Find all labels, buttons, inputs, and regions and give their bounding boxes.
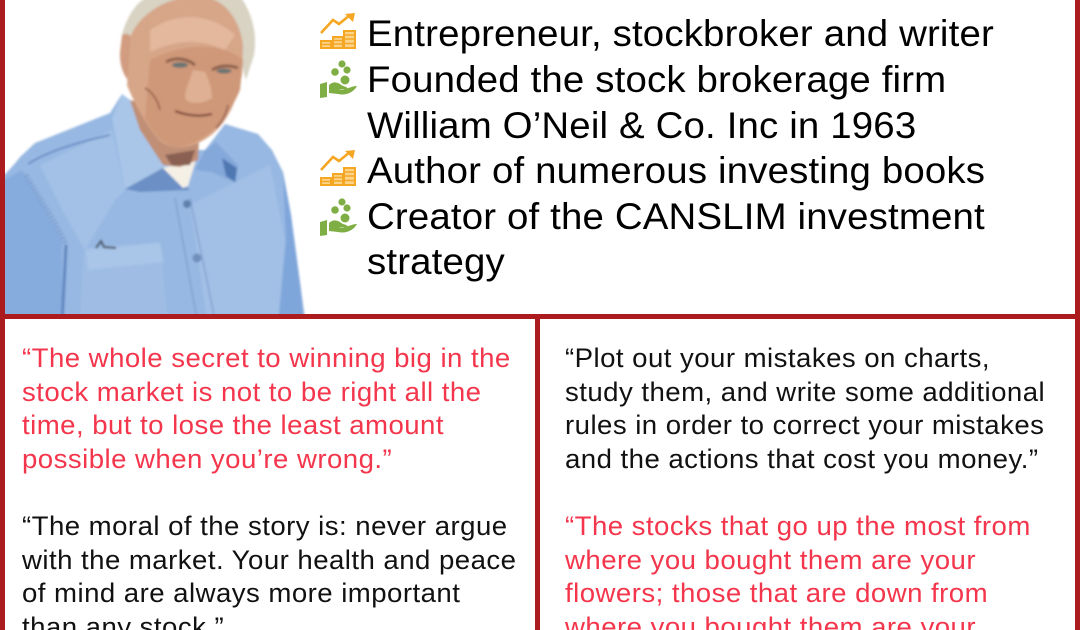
- nose: [185, 70, 212, 103]
- quote: left top: “The whole secret to winning big in the: [22, 343, 511, 373]
- biography list: Entrepreneur, stockbroker and writer: [367, 12, 994, 54]
- face: [127, 0, 243, 147]
- shirt: [0, 94, 306, 325]
- biography list: strategy: [367, 240, 505, 282]
- quote: left top: stock market is not to be right all the: [22, 377, 481, 407]
- quote: left bottom: [22, 511, 516, 630]
- quote: left bottom: with the market. Your health and peace: [22, 545, 516, 575]
- quote: right top: and the actions that cost you money.”: [565, 444, 1038, 474]
- quote: right top: [565, 343, 1045, 474]
- biography list: [367, 12, 994, 282]
- icon: hand with coins: [320, 198, 357, 236]
- quote: left top: [22, 343, 511, 474]
- quote: right top: study them, and write some additional: [565, 377, 1045, 407]
- quote: right top: rules in order to correct your mistakes: [565, 410, 1044, 440]
- icon: hand with coins: [320, 60, 357, 98]
- biography list: Author of numerous investing books: [367, 149, 985, 191]
- icon: growth chart with coins: [320, 150, 356, 186]
- quote: right top: “Plot out your mistakes on charts,: [565, 343, 990, 373]
- pen: [96, 241, 116, 248]
- biography list: William O’Neil & Co. Inc in 1963: [367, 104, 916, 146]
- ear: [118, 33, 132, 80]
- quote: left bottom: “The moral of the story is: never argue: [22, 511, 508, 541]
- quote: right bottom: [565, 511, 1031, 630]
- collar: [112, 94, 166, 188]
- quote: right bottom: where you bought them are your: [565, 545, 976, 575]
- undershirt: [163, 160, 196, 188]
- quote: left bottom: of mind are always more important: [22, 578, 460, 608]
- neck: [130, 100, 200, 167]
- biography list: Founded the stock brokerage firm: [367, 58, 946, 100]
- icon: growth chart with coins: [320, 13, 356, 49]
- portrait: man in blue shirt: [5, 0, 306, 314]
- biography list: Creator of the CANSLIM investment: [367, 195, 985, 237]
- quote: left top: time, but to lose the least amount: [22, 410, 444, 440]
- quote: right bottom: “The stocks that go up the most from: [565, 511, 1031, 541]
- quote: right bottom: flowers; those that are down from: [565, 578, 988, 608]
- buttons: [183, 200, 191, 208]
- quote: left top: possible when you’re wrong.”: [22, 444, 392, 474]
- eyes and brows: [166, 59, 238, 70]
- frame borders: [0, 0, 5, 630]
- mouth: [175, 111, 212, 116]
- hair: [122, 0, 255, 80]
